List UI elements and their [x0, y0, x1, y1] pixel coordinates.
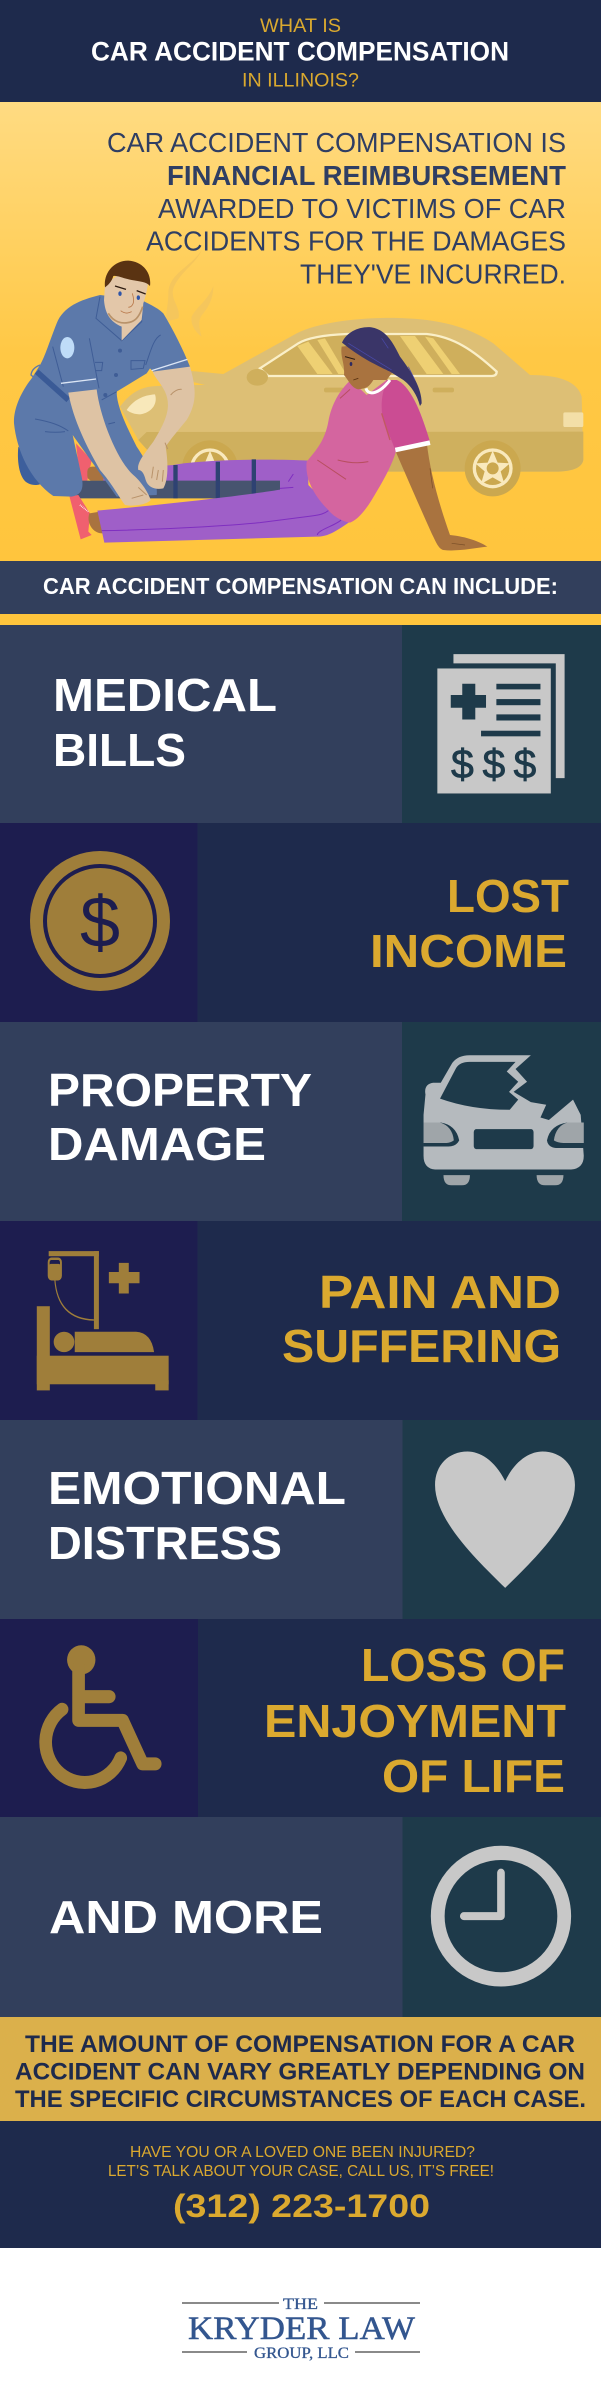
icon: dollar coin: $ [80, 883, 120, 963]
smoke [166, 250, 213, 337]
subheading band: CAR ACCIDENT COMPENSATION CAN INCLUDE: [43, 573, 558, 599]
row: lost income: LOST [447, 870, 569, 922]
wrecked car [120, 318, 583, 496]
row: loss of enjoyment of life: LOSS OF [361, 1639, 565, 1691]
hero intro paragraph: CAR ACCIDENT COMPENSATION IS [107, 127, 566, 158]
row: and more: AND MORE [49, 1891, 323, 1943]
paramedic [14, 261, 195, 506]
icon: medical bill [437, 654, 565, 793]
row: loss of enjoyment of life [0, 1619, 601, 1817]
logo: The Kryder Law Group: KRYDER LAW [188, 2311, 416, 2347]
call to action footer: (312) 223-1700 [173, 2188, 430, 2224]
hero intro paragraph: AWARDED TO VICTIMS OF CAR [158, 193, 566, 224]
icon: damaged car [424, 1055, 584, 1185]
row: property damage: DAMAGE [48, 1118, 266, 1170]
header: title block: WHAT IS [260, 16, 341, 37]
icon: clock [438, 1853, 564, 1979]
icon: hospital bed [37, 1251, 169, 1390]
row: lost income: INCOME [370, 925, 567, 977]
row: emotional distress [0, 1420, 601, 1619]
header: title block: IN ILLINOIS? [242, 70, 359, 92]
logo: The Kryder Law Group: GROUP, LLC [254, 2345, 349, 2362]
row: pain and suffering: SUFFERING [282, 1320, 561, 1372]
row: property damage [0, 1022, 601, 1221]
row: emotional distress: EMOTIONAL [48, 1462, 346, 1514]
row: property damage: PROPERTY [48, 1064, 312, 1116]
row: loss of enjoyment of life: OF LIFE [382, 1750, 565, 1802]
row: medical bills [0, 625, 601, 823]
injured woman [306, 327, 487, 550]
header: title block [0, 0, 601, 102]
subheading band [0, 561, 601, 614]
icon: medical bill: $ [482, 741, 506, 787]
callout: compensation varies: THE AMOUNT OF COMPENSATION FOR A CAR [25, 2031, 575, 2058]
woman's legs with splint [69, 443, 350, 543]
hero intro paragraph: FINANCIAL REIMBURSEMENT [167, 160, 566, 191]
logo: The Kryder Law Group: THE [283, 2296, 318, 2313]
hero intro paragraph: ACCIDENTS FOR THE DAMAGES [146, 226, 566, 256]
call to action footer [0, 2121, 601, 2248]
call to action footer: HAVE YOU OR A LOVED ONE BEEN INJURED? [130, 2144, 475, 2161]
row: emotional distress: DISTRESS [48, 1517, 282, 1569]
callout: compensation varies [0, 2017, 601, 2121]
illustration: accident scene [14, 250, 583, 550]
hero intro paragraph: THEY'VE INCURRED. [300, 258, 566, 290]
row: pain and suffering: PAIN AND [319, 1266, 561, 1318]
row: loss of enjoyment of life: ENJOYMENT [264, 1695, 566, 1747]
callout: compensation varies: THE SPECIFIC CIRCUMSTANCES OF EACH CASE. [15, 2086, 586, 2113]
header: title block: CAR ACCIDENT COMPENSATION [91, 36, 509, 66]
callout: compensation varies: ACCIDENT CAN VARY GREATLY DEPENDING ON [15, 2058, 585, 2086]
row: pain and suffering [0, 1221, 601, 1420]
icon: wheelchair [46, 1645, 155, 1783]
row: and more [0, 1817, 601, 2017]
row: lost income [0, 823, 601, 1022]
panel: yellow hero illustration [0, 102, 601, 561]
icon: heart [435, 1452, 575, 1588]
row: medical bills: BILLS [53, 724, 186, 776]
icon: medical bill: $ [451, 741, 474, 787]
call to action footer: LET’S TALK ABOUT YOUR CASE, CALL US, IT’S FREE! [108, 2163, 494, 2180]
logo: The Kryder Law Group [182, 2296, 420, 2362]
icon: dollar coin [30, 851, 170, 991]
row: medical bills: MEDICAL [53, 669, 277, 721]
hero intro paragraph [107, 127, 566, 290]
icon: medical bill: $ [514, 741, 536, 787]
